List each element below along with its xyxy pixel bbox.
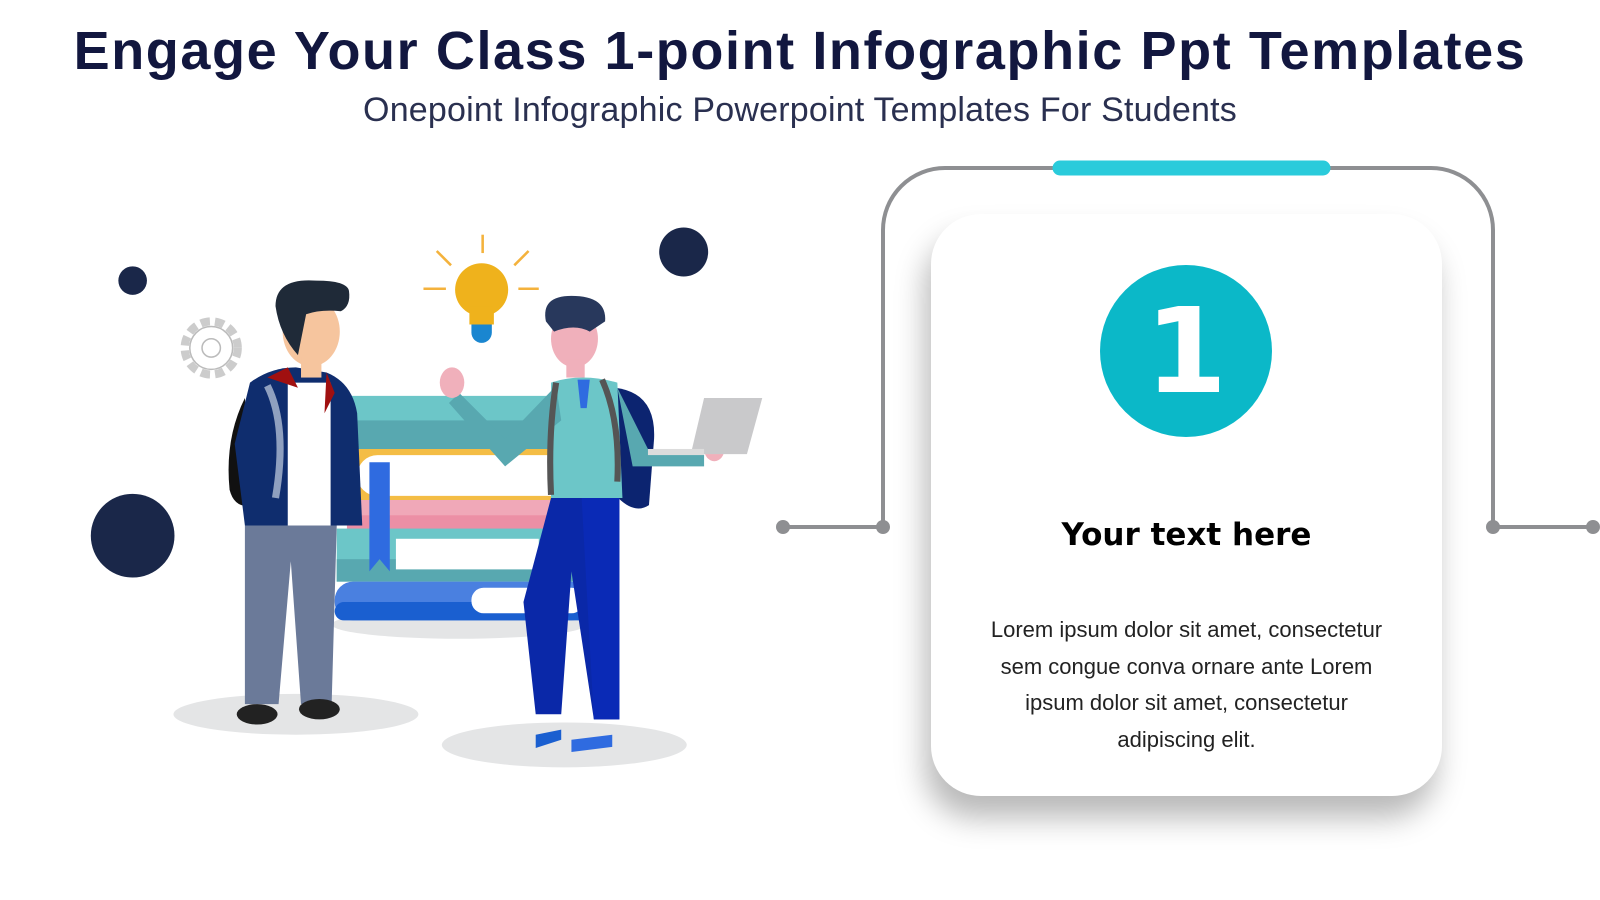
student left [229,280,362,724]
shadows [173,610,687,767]
dots [91,228,708,578]
icon: light bulb [423,235,539,343]
title: Engage Your Class 1-point Infographic Ppt Templates [74,21,1526,81]
student right [440,296,762,752]
books stack [335,396,590,620]
accent bar [1060,160,1323,176]
card body text: Lorem ipsum dolor sit amet, consectetur sem congue conva ornare ante Lorem ipsum dolor sit amet, consectetur adipiscing elit. [991,617,1382,752]
number circle: 1 [1145,282,1227,420]
number circle [1100,265,1272,437]
card heading: Your text here [1062,517,1311,553]
icon: gear [185,321,238,374]
subtitle: Onepoint Infographic Powerpoint Templates For Students [363,91,1237,129]
card [931,214,1442,796]
